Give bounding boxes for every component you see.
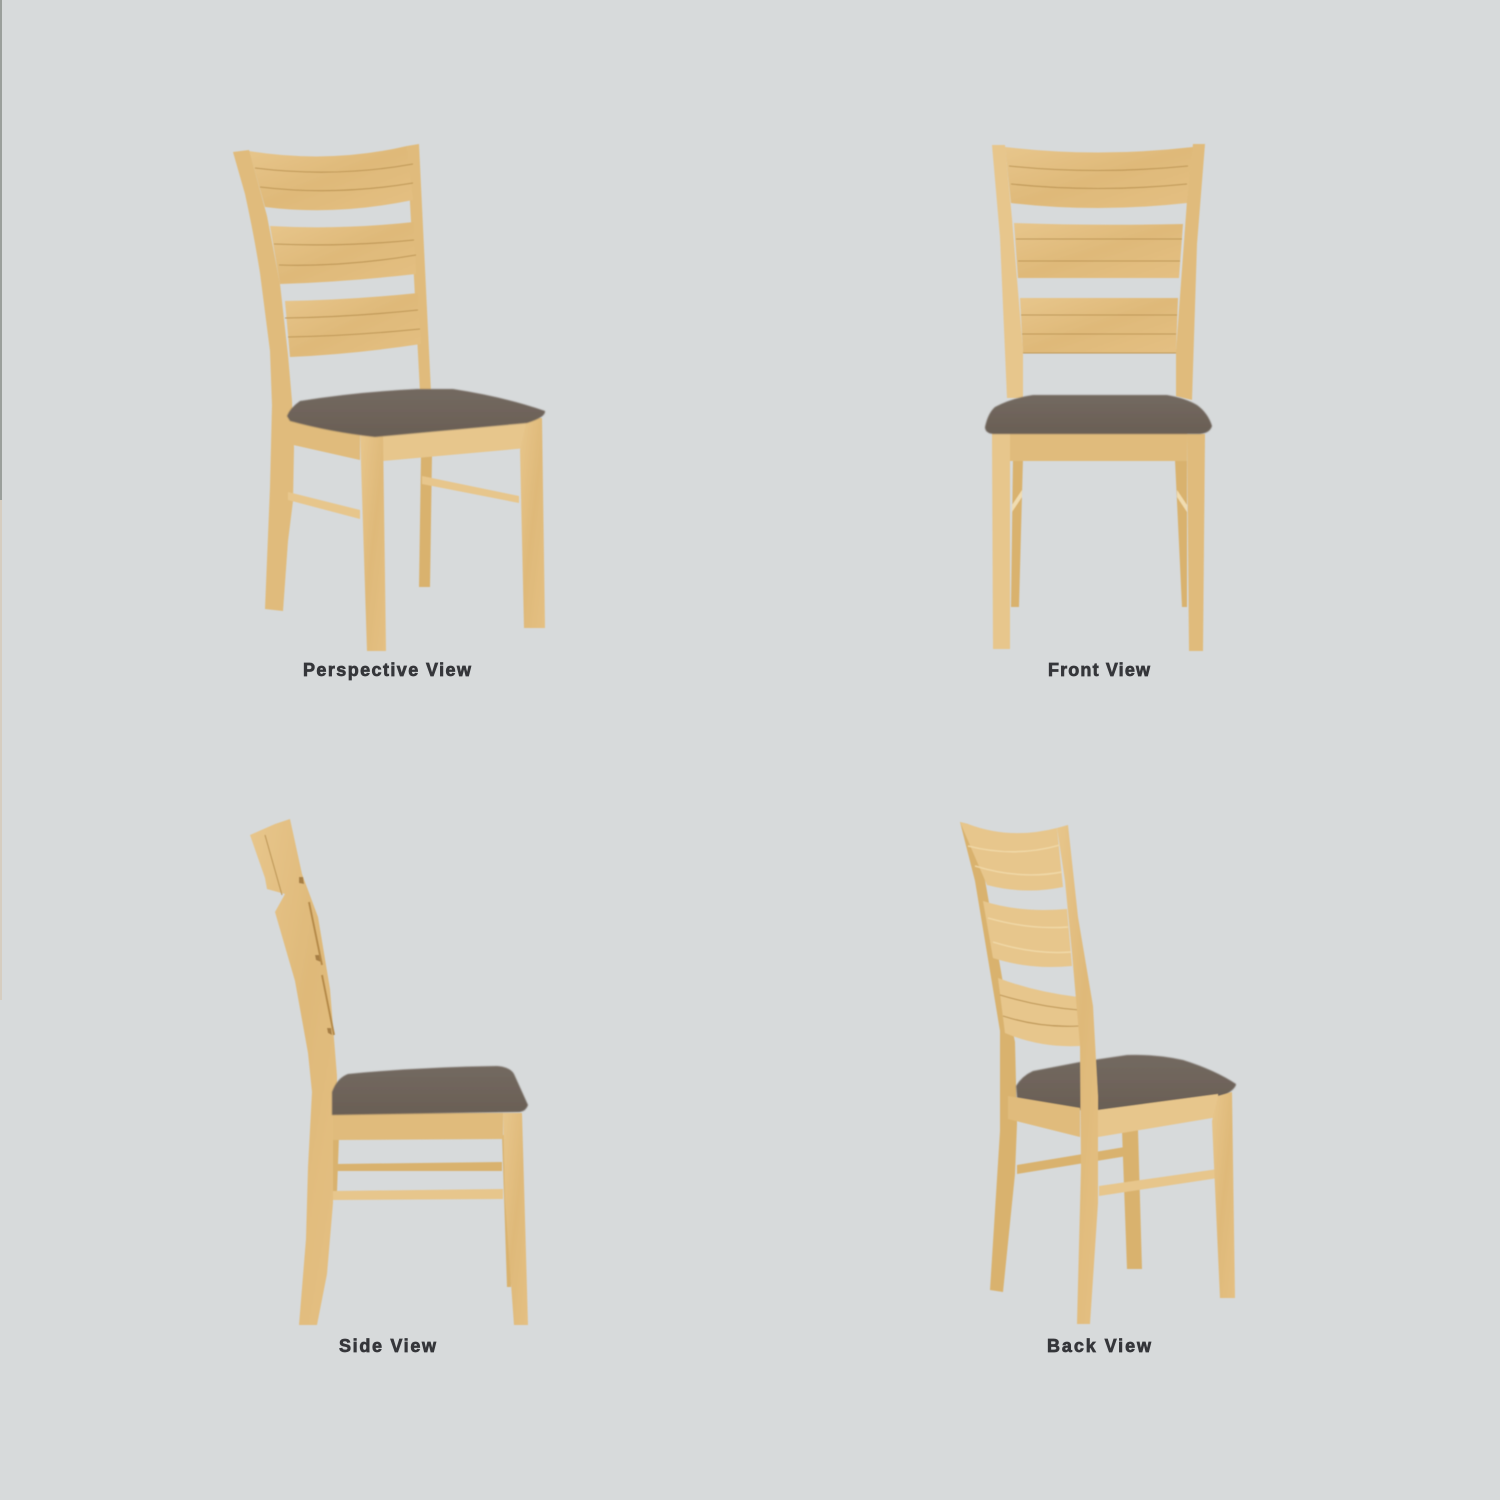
panel: back view xyxy=(960,822,1236,1356)
front apron xyxy=(383,418,527,461)
side apron xyxy=(289,415,360,460)
right side stretcher xyxy=(1177,490,1187,512)
left apron xyxy=(1008,1096,1080,1137)
seat cushion xyxy=(985,395,1212,434)
chair: side view xyxy=(250,819,528,1325)
left side stretcher xyxy=(1012,490,1022,512)
middle back rail xyxy=(270,222,416,284)
label: side view: Side View xyxy=(339,1336,437,1356)
chair: front view xyxy=(985,144,1212,651)
side stretcher left xyxy=(288,492,360,519)
near stretcher xyxy=(1099,1169,1218,1196)
seat cushion xyxy=(287,389,545,437)
top back rail xyxy=(1005,147,1193,208)
rear leg xyxy=(419,455,432,587)
left front leg xyxy=(992,433,1010,649)
lower back rail xyxy=(285,293,421,357)
front leg xyxy=(503,1113,528,1325)
panel: perspective view xyxy=(233,144,545,680)
label: back view: Back View xyxy=(1047,1336,1152,1356)
centre rear leg xyxy=(1122,1130,1142,1269)
middle back rail xyxy=(983,901,1072,967)
far stile and leg xyxy=(960,822,1017,1292)
back detail marks xyxy=(265,835,334,1035)
back rail grooves xyxy=(255,164,420,337)
back rail grooves xyxy=(968,845,1079,1026)
back rail grooves xyxy=(1009,166,1188,353)
apron xyxy=(333,1113,503,1140)
right front leg xyxy=(1187,434,1205,651)
chair: back view xyxy=(960,822,1236,1324)
right apron xyxy=(1098,1094,1218,1137)
rear left leg xyxy=(1011,458,1023,607)
chair: perspective view xyxy=(233,144,545,651)
side stretcher right xyxy=(422,476,519,503)
label: front view: Front View xyxy=(1048,660,1151,680)
top back rail xyxy=(249,146,413,210)
lower stretcher xyxy=(333,1189,503,1200)
far stretcher xyxy=(1017,1147,1127,1174)
upper stretcher xyxy=(335,1162,502,1171)
left edge strip xyxy=(0,0,2,1000)
back far leg sliver xyxy=(333,1135,339,1192)
top back rail xyxy=(960,822,1063,891)
rear far leg xyxy=(502,1135,511,1287)
right stile xyxy=(407,144,431,392)
left stile xyxy=(992,145,1023,398)
seat cushion xyxy=(1016,1055,1236,1113)
middle back rail xyxy=(1014,223,1183,278)
rear right leg xyxy=(1175,460,1187,607)
near stile and leg xyxy=(1057,825,1098,1324)
front leg xyxy=(360,431,386,651)
apron xyxy=(1010,433,1187,461)
back stile and leg xyxy=(250,819,337,1325)
right leg xyxy=(1212,1092,1235,1298)
lower back rail xyxy=(1020,298,1178,353)
label: perspective view: Perspective View xyxy=(303,660,472,680)
panel: front view xyxy=(985,144,1212,680)
left stile and back leg xyxy=(233,150,294,611)
right front leg xyxy=(520,418,545,628)
panel: side view xyxy=(250,819,528,1356)
right stile xyxy=(1176,144,1205,400)
seat cushion xyxy=(332,1066,528,1115)
lower back rail xyxy=(998,978,1080,1046)
